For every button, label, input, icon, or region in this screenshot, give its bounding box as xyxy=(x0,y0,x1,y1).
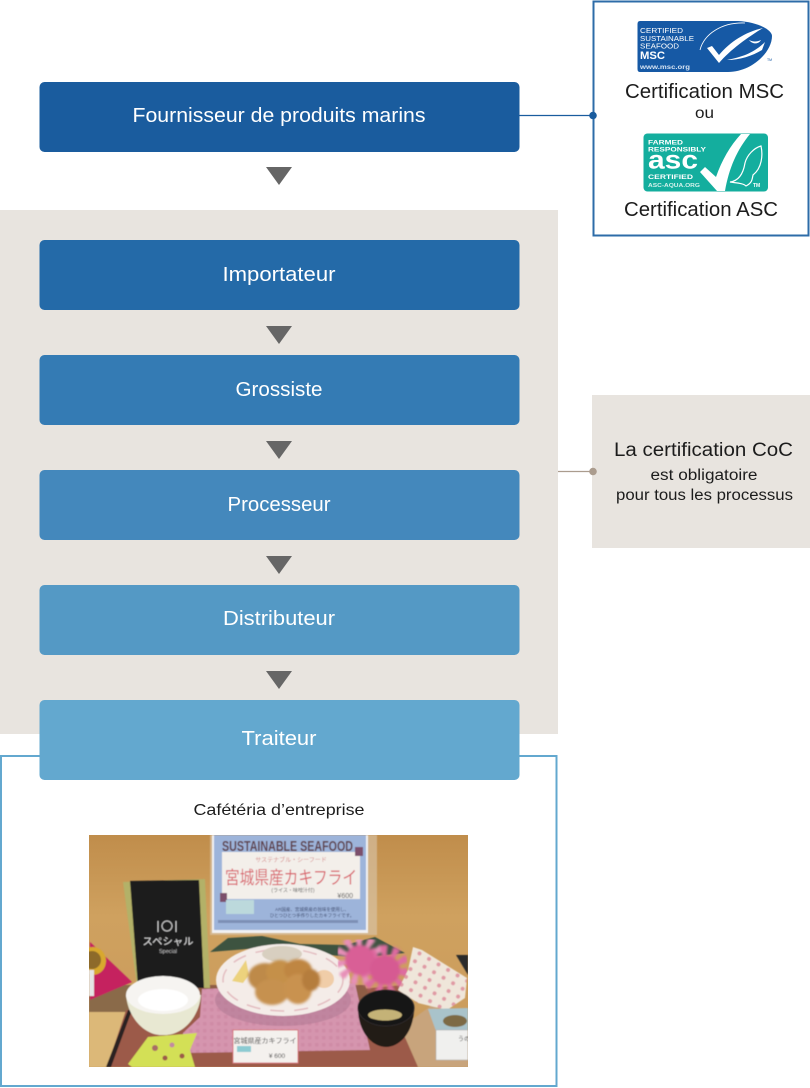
logo: ASC: asc xyxy=(648,144,698,174)
logo: ASC: ASC-AQUA.ORG xyxy=(648,183,700,189)
photo: cafeteria sustainable seafood display: (ライス・味噌汁付) xyxy=(271,887,315,894)
arrow xyxy=(266,556,292,574)
acrylic reflection xyxy=(210,835,377,935)
label: ou: ou xyxy=(695,105,714,122)
panel: CoC note xyxy=(592,395,810,548)
box: Importateur xyxy=(40,240,520,310)
price label xyxy=(233,1030,298,1063)
black menu card xyxy=(123,879,210,988)
arrow xyxy=(266,441,292,459)
photo: cafeteria sustainable seafood display: ¥ 600 xyxy=(269,1053,286,1060)
leaves xyxy=(210,936,405,958)
logo: MSC: MSC xyxy=(640,50,665,62)
logo: MSC xyxy=(638,21,772,72)
logo: ASC: TM xyxy=(753,183,760,189)
arrow xyxy=(266,167,292,185)
connector: supplier to certifications xyxy=(519,112,597,119)
box: Fournisseur de produits marins xyxy=(40,82,520,152)
caption: Cafétéria d'entreprise: Cafétéria d’entreprise xyxy=(194,802,365,819)
logo: MSC: SUSTAINABLE xyxy=(640,34,694,43)
label: Certification ASC: Certification ASC xyxy=(624,199,778,221)
box: Traiteur xyxy=(40,700,520,780)
counter and tray xyxy=(89,984,132,1012)
connector: chain to CoC note xyxy=(558,468,597,475)
box: Processeur: Processeur xyxy=(228,494,331,516)
photo: cafeteria sustainable seafood display: スペシャル xyxy=(142,937,194,948)
photo: cafeteria sustainable seafood display: 宮城県産カキフライ xyxy=(234,1036,296,1045)
miso bowl xyxy=(358,1008,414,1047)
panel: certifications xyxy=(594,2,808,236)
logo: MSC: CERTIFIED xyxy=(640,26,684,35)
logo: MSC: www.msc.org xyxy=(639,64,690,71)
mat xyxy=(183,983,370,1053)
photo: cafeteria sustainable seafood display: Special xyxy=(159,949,177,955)
box: Importateur: Importateur xyxy=(222,264,336,286)
pink cloth xyxy=(90,942,132,1000)
logo: MSC: TM xyxy=(767,58,772,62)
logo: ASC: RESPONSIBLY xyxy=(648,148,706,154)
box: Processeur xyxy=(40,470,520,540)
box: Fournisseur de produits marins: Fournisseur de produits marins xyxy=(132,105,426,127)
box: Distributeur: Distributeur xyxy=(223,608,335,630)
rice bowl xyxy=(126,995,201,1035)
logo: ASC: CERTIFIED xyxy=(648,174,693,181)
photo: cafeteria sustainable seafood display: AR国産、宮城県産の旨味を使用し、 xyxy=(275,906,349,913)
logo: ASC xyxy=(644,134,768,192)
label: Certification MSC: Certification MSC xyxy=(625,81,784,103)
box: Grossiste: Grossiste xyxy=(236,379,322,401)
logo: MSC: SEAFOOD xyxy=(640,42,680,50)
plate xyxy=(216,944,350,1016)
photo: cafeteria sustainable seafood display: ひとつひとつ手作りしたカキフライです。 xyxy=(270,912,354,919)
photo: cafeteria sustainable seafood display: ¥600 xyxy=(337,893,353,900)
logo: ASC: FARMED xyxy=(648,140,684,146)
box: Distributeur xyxy=(40,585,520,655)
photo: cafeteria sustainable seafood display: サステナブル・シーフード xyxy=(255,856,327,864)
arrow xyxy=(266,326,292,344)
panel: corporate cafeteria xyxy=(1,756,556,1086)
yellow lace xyxy=(128,1033,197,1067)
flowers xyxy=(344,944,401,986)
box: Grossiste xyxy=(40,355,520,425)
arrow xyxy=(266,671,292,689)
photo: cafeteria sustainable seafood display: うの xyxy=(458,1036,470,1043)
sign xyxy=(212,835,368,933)
right card xyxy=(428,1008,468,1031)
napkin xyxy=(398,947,467,1010)
panel: CoC note: pour tous les processus xyxy=(616,487,793,504)
photo: cafeteria sustainable seafood display: 宮城県産カキフライ xyxy=(225,868,357,888)
box: Traiteur: Traiteur xyxy=(242,728,317,750)
panel: CoC certified chain background xyxy=(0,210,558,734)
photo: cafeteria sustainable seafood display: SUSTAINABLE SEAFOOD xyxy=(222,839,353,855)
panel: CoC note: est obligatoire xyxy=(650,467,758,484)
photo: cafeteria sustainable seafood display xyxy=(80,835,470,1067)
panel: CoC note: La certification CoC xyxy=(614,440,793,461)
